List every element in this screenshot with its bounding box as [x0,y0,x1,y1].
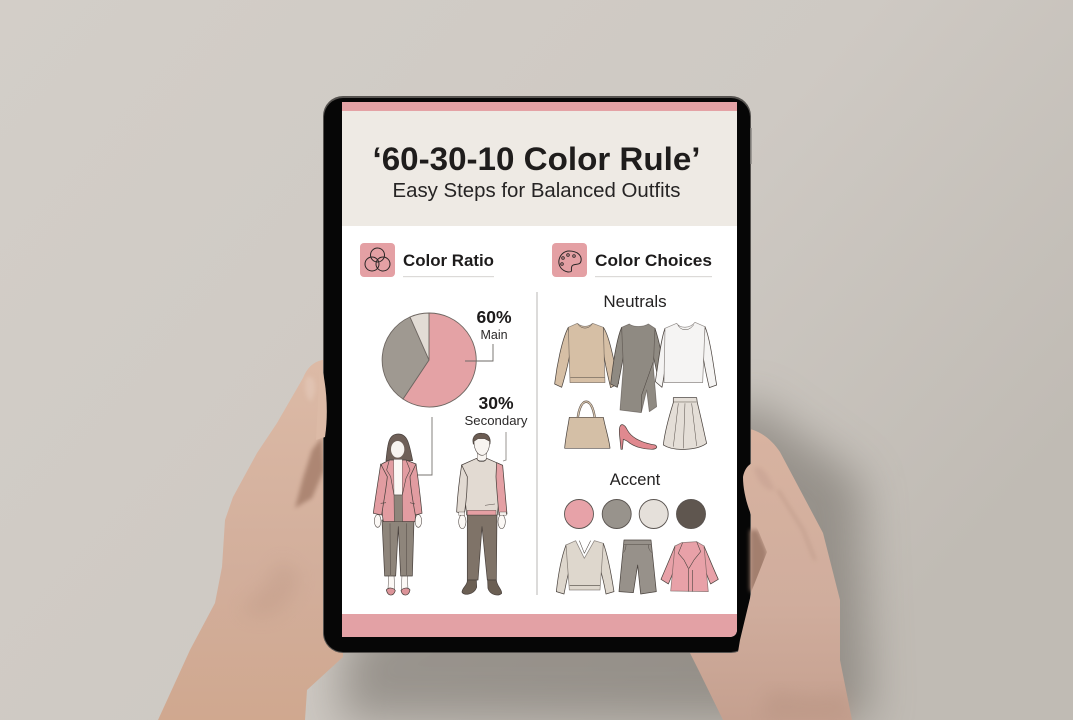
icon: handbag [565,402,610,448]
icon: pink high heel [619,425,657,449]
tablet screen [342,102,737,637]
header panel [342,111,737,226]
top pink strip [342,102,737,111]
subtitle: Easy Steps for Balanced Outfits [392,180,680,202]
pie chart [382,313,476,407]
icon: v-neck sweater [556,541,614,594]
accent clothing group [556,540,718,594]
label: 30% secondary: Secondary [464,413,528,428]
right hand: back of hand and fingers [690,428,852,720]
callout line to blazer [413,417,432,475]
heading: Color Ratio: Color Ratio [403,251,494,270]
label: Neutrals: Neutrals [603,292,667,311]
tablet body [323,96,752,653]
title: ‘60-30-10 Color Rule’ [372,141,700,177]
heading: Color Choices: Color Choices [595,251,712,270]
icon: grey dress [611,324,665,413]
icon: beige sweater [555,323,619,388]
pie slice: 30% secondary [382,317,429,399]
icon: palette [552,243,587,277]
icon: overlapping color circles [360,243,395,277]
woman figure [373,434,422,595]
right thumb and palm overlapping tablet [738,462,850,720]
label: 30% secondary [464,393,528,428]
icon: grey trousers [619,540,656,594]
left hand [158,360,345,720]
label: Accent: Accent [610,471,661,489]
bottom pink strip [342,614,737,637]
callout line to pie [465,344,493,361]
pie slice: 10% accent [410,313,429,360]
label: 60% main: Main [480,328,508,342]
man figure [457,433,507,595]
neutrals clothing group [555,322,717,449]
callout line to sweater [503,432,506,461]
tablet shadow [340,400,870,720]
left thumb overlapping tablet edge [316,361,327,440]
label: 60% main: 60% [476,307,512,327]
icon: pink blazer [661,542,718,592]
label: 30% secondary: 30% [478,393,514,413]
icon: pleated skirt [663,398,707,449]
accent color swatches [564,500,706,528]
icon: white sweater [655,322,717,388]
pie slice: 60% main [403,313,476,407]
label: 60% main [476,307,512,342]
